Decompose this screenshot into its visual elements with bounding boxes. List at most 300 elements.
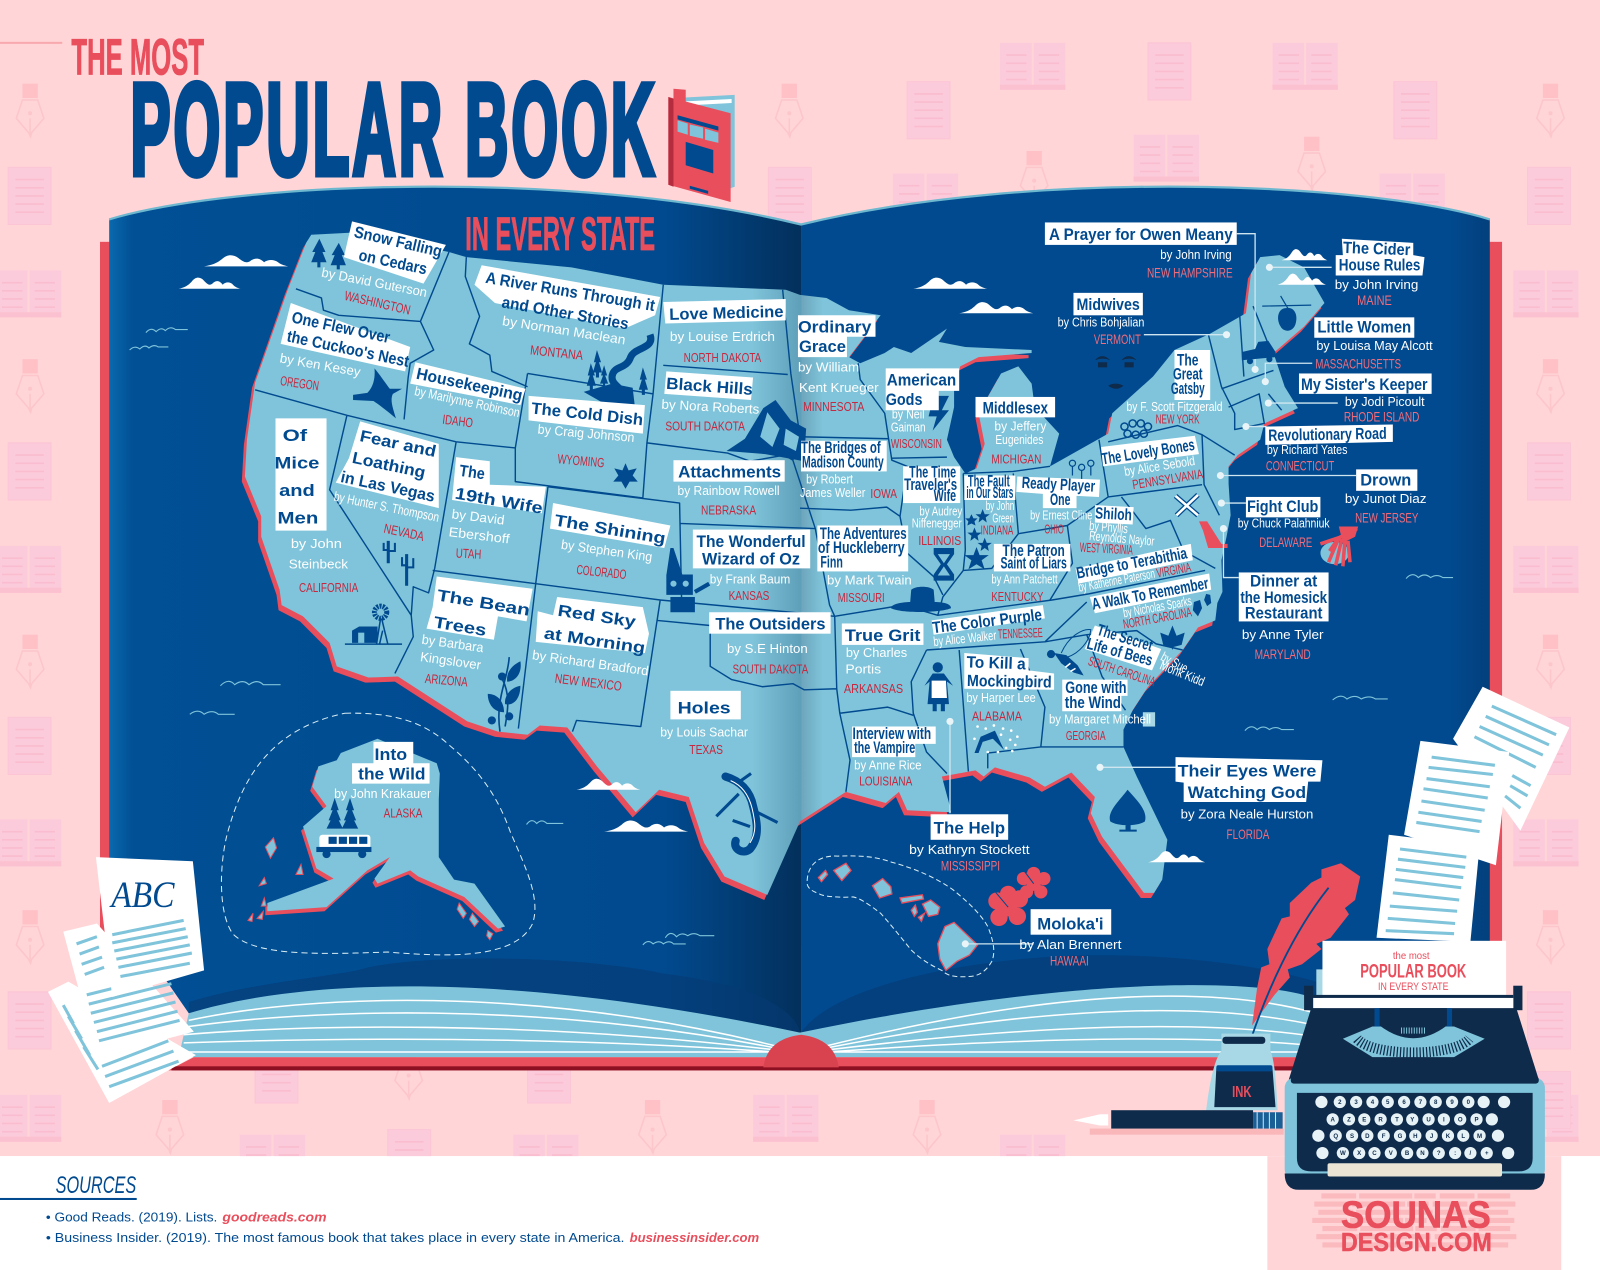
label: South Dakota — [661, 371, 760, 434]
label: Missouri: The Adventures — [820, 525, 907, 543]
label: Indiana: Green — [992, 510, 1014, 525]
label: North Carolina — [1090, 573, 1211, 632]
label: Connecticut — [1265, 424, 1393, 474]
label: Louisiana: LOUISIANA — [859, 774, 912, 789]
icon: florida tree — [1110, 790, 1145, 832]
label: New York: Great — [1173, 366, 1203, 384]
label: Nevada: NEVADA — [382, 521, 426, 544]
keyboard letters: 9 — [1450, 1099, 1454, 1106]
keyboard letters: : — [1454, 1150, 1456, 1157]
icon: pickup truck — [1242, 341, 1276, 364]
label: Ohio: by Ernest Cline — [1030, 507, 1092, 522]
label: New Hampshire — [1045, 222, 1237, 282]
label: Arizona: Trees — [432, 613, 488, 640]
book spine — [763, 1035, 839, 1067]
label: Georgia: Gone with — [1065, 679, 1127, 697]
label: North Dakota: Love Medicine — [669, 303, 784, 324]
label: Wyoming: WYOMING — [557, 451, 605, 470]
label: Utah — [448, 457, 546, 562]
label: Pennsylvania — [1100, 436, 1204, 492]
keyboard letters: 3 — [1354, 1099, 1358, 1106]
label: Arizona: ARIZONA — [424, 671, 468, 690]
fountain pen — [1073, 1110, 1284, 1135]
label: Oklahoma: The Outsiders — [715, 616, 826, 634]
keyboard letters: Q — [1333, 1133, 1338, 1140]
keyboard letters: B — [1405, 1150, 1410, 1157]
label: Utah: The — [458, 462, 486, 483]
label: Iowa: IOWA — [870, 486, 897, 501]
label: Tennessee: TENNESSEE — [998, 625, 1043, 642]
label: Georgia: GEORGIA — [1066, 728, 1106, 743]
book page block — [179, 985, 1327, 1057]
icon: face with eyes and lips — [1095, 356, 1137, 389]
keyboard letters: ? — [1437, 1150, 1441, 1157]
label: Florida: by Zora Neale Hurston — [1181, 806, 1313, 821]
label: Hawaii: Moloka'i — [1037, 916, 1104, 934]
loose papers, left — [48, 857, 204, 1103]
ink bottle — [1206, 1034, 1278, 1110]
label: Indiana — [964, 473, 1015, 538]
label: Arkansas: Portis — [845, 661, 882, 676]
keyboard letters: G — [1398, 1133, 1403, 1140]
keyboard letters: V — [1389, 1150, 1394, 1157]
label: New Jersey: Drown — [1360, 472, 1411, 490]
keyboard letters: W — [1340, 1150, 1346, 1157]
label: Oregon: the Cuckoo's Nest — [285, 327, 411, 371]
icon: hibiscus flowers — [988, 867, 1051, 926]
label: Illinois: Wife — [934, 487, 956, 505]
label: Tennessee: The Color Purple — [931, 606, 1043, 637]
label: Utah: UTAH — [455, 546, 482, 562]
label: Florida: Their Eyes Were — [1178, 763, 1316, 781]
keyboard letters: U — [1426, 1116, 1431, 1123]
label: South Carolina: Monk Kidd — [1158, 658, 1207, 689]
icon: red book — [668, 89, 735, 202]
label: Wisconsin: Gods — [886, 391, 922, 409]
label: Louisiana: Interview with — [853, 725, 931, 743]
label: Illinois — [903, 464, 963, 548]
keyboard letters: O — [1458, 1116, 1463, 1123]
label: Pennsylvania: by Alice Sebold — [1123, 453, 1196, 479]
sources list: goodreads.com — [221, 1209, 327, 1224]
label: South Carolina: SOUTH CAROLINA — [1086, 653, 1157, 689]
label: Mississippi: by Kathryn Stockett — [909, 842, 1030, 857]
label: Washington: by David Guterson — [320, 265, 428, 300]
title: POPULAR BOOK — [131, 58, 654, 202]
keyboard letters: / — [1470, 1150, 1472, 1157]
label: Utah: by David — [451, 506, 505, 528]
icon: bird — [353, 368, 402, 418]
label: Massachusetts: MASSACHUSETTS — [1315, 356, 1401, 372]
label: Idaho — [410, 362, 526, 430]
label: California: Of — [283, 427, 308, 445]
label: Alabama — [964, 653, 1054, 723]
label: Tennessee — [931, 605, 1045, 649]
label: Maryland: Restaurant — [1245, 604, 1323, 622]
label: Michigan: Middlesex — [983, 399, 1048, 417]
label: Iowa: by Robert — [806, 472, 853, 487]
icon: stars — [964, 509, 992, 569]
label: North Dakota: by Louise Erdrich — [670, 329, 775, 344]
label: Kansas: KANSAS — [729, 588, 770, 603]
label: Alabama: by Harper Lee — [966, 690, 1036, 705]
sources list: businessinsider.com — [630, 1230, 759, 1245]
label: Minnesota: Ordinary — [798, 319, 871, 337]
label: Nebraska: Attachments — [678, 464, 781, 482]
label: Louisiana: by Anne Rice — [854, 757, 921, 772]
icon: pearl necklace — [1121, 420, 1152, 438]
label: Alaska — [334, 742, 432, 820]
label: Washington: Snow Falling — [352, 223, 444, 261]
title: THE MOST — [71, 28, 204, 85]
keyboard letters: F — [1382, 1133, 1386, 1140]
label: Hawaii — [1019, 909, 1122, 969]
typewriter paper: the most — [1393, 951, 1430, 962]
book cover — [100, 242, 1502, 1070]
icon: apple branch — [1262, 296, 1311, 331]
label: Tennessee: by Alice Walker — [933, 628, 997, 649]
label: Kansas — [693, 530, 810, 603]
icon: pine trees — [311, 239, 346, 269]
label: Nevada: Fear and — [358, 427, 438, 461]
label: Maryland — [1239, 572, 1329, 663]
label: Washington: on Cedars — [357, 246, 429, 278]
keyboard letters: A — [1330, 1116, 1335, 1123]
label: Delaware: Fight Club — [1247, 498, 1318, 516]
keyboard letters: D — [1365, 1133, 1370, 1140]
keyboard letters: J — [1430, 1133, 1433, 1140]
label: Arizona: Kingslover — [419, 649, 483, 673]
label: Nevada: by Hunter S. Thompson — [333, 489, 441, 525]
label: Idaho: by Marilynne Robinson — [413, 383, 521, 420]
typewriter paper: POPULAR BOOK — [1360, 961, 1466, 983]
label: Ohio — [1016, 474, 1100, 537]
label: Arkansas: ARKANSAS — [844, 681, 903, 696]
label: Georgia: the Wind — [1065, 694, 1121, 712]
logo: DESIGN.COM — [1341, 1229, 1492, 1257]
keyboard letters: 4 — [1371, 1099, 1375, 1106]
label: Arizona — [419, 577, 533, 690]
label: Alabama: Mockingbird — [967, 672, 1052, 691]
keyboard letters: 7 — [1419, 1099, 1423, 1106]
label: Louisiana — [852, 725, 936, 789]
label: Missouri: by Mark Twain — [827, 573, 912, 588]
label: Kansas: The Wonderful — [696, 533, 806, 551]
icon: red hand — [1320, 527, 1358, 566]
label: Nebraska: NEBRASKA — [701, 502, 756, 517]
keyboard letters: Z — [1347, 1116, 1351, 1123]
label: North Carolina: by Nicholas Sparks — [1122, 593, 1193, 620]
sources list — [46, 1209, 759, 1245]
label: New Jersey: by Junot Diaz — [1345, 491, 1427, 506]
label: Ohio: Ready Player — [1021, 474, 1096, 496]
label: Kentucky: KENTUCKY — [991, 589, 1043, 604]
label: Connecticut: CONNECTICUT — [1266, 458, 1334, 474]
label: Arizona: The Bean — [436, 587, 531, 620]
label: Arkansas: by Charles — [846, 645, 907, 660]
label: Nebraska: by Rainbow Rowell — [678, 483, 780, 498]
label: Vermont: by Chris Bohjalian — [1058, 315, 1144, 330]
keyboard keys — [1312, 1096, 1514, 1159]
book pages — [109, 187, 1490, 1033]
label: Texas: Holes — [678, 699, 731, 717]
label: New York: Gatsby — [1171, 380, 1205, 398]
label: Oklahoma — [709, 612, 831, 676]
ocean waves — [130, 328, 1453, 945]
label: Kansas: by Frank Baum — [710, 572, 790, 587]
sources list: • Good Reads. (2019). Lists. — [46, 1209, 217, 1224]
label: Rhode Island: by Jodi Picoult — [1345, 394, 1425, 409]
label: Kentucky: Saint of Liars — [1001, 554, 1067, 572]
logo panel — [1267, 1156, 1561, 1270]
label: Montana — [474, 265, 660, 363]
label: Nebraska — [673, 460, 785, 517]
label: Illinois: by Audrey — [919, 503, 963, 518]
label: Washington: WASHINGTON — [343, 288, 412, 318]
label: Florida: FLORIDA — [1227, 827, 1270, 843]
label: Wisconsin: WISCONSIN — [891, 436, 942, 451]
label: Rhode Island — [1299, 373, 1432, 425]
sources list: • Business Insider. (2019). The most famous book that takes place in every state in America. — [46, 1230, 624, 1245]
label: Maryland: by Anne Tyler — [1242, 627, 1324, 642]
label: Illinois: Niffenegger — [912, 516, 962, 531]
label: Connecticut: Revolutionary Road — [1268, 425, 1387, 445]
label: Vermont: Midwives — [1077, 296, 1140, 314]
label: West Virginia: by Phyllis — [1089, 518, 1129, 536]
label: Indiana: The Fault — [968, 473, 1010, 491]
keyboard letters: N — [1420, 1150, 1425, 1157]
label: Georgia — [1049, 679, 1155, 743]
label: Delaware: by Chuck Palahniuk — [1238, 516, 1330, 531]
label: California — [274, 418, 358, 595]
label: Michigan: Eugenides — [995, 432, 1044, 447]
label: Vermont: VERMONT — [1094, 332, 1141, 348]
icon: woman in apron — [924, 662, 953, 711]
label: North Carolina: NORTH CAROLINA — [1122, 604, 1193, 632]
icon: hourglass — [934, 548, 954, 581]
label: New Hampshire: by John Irving — [1160, 247, 1232, 262]
label: Delaware: DELAWARE — [1259, 535, 1312, 551]
keyboard letters: 8 — [1434, 1099, 1438, 1106]
icon: lizard — [716, 773, 778, 851]
label: Illinois: The Time — [909, 464, 956, 482]
keyboard letters: I — [1443, 1116, 1445, 1123]
label: Wisconsin: by Neil — [892, 406, 925, 421]
label: West Virginia: WEST VIRGINIA — [1079, 540, 1133, 557]
label: Indiana: by John — [986, 498, 1014, 513]
icon: keys — [1069, 460, 1094, 480]
icon: lightning bolt — [929, 396, 949, 431]
ink bottle: INK — [1232, 1084, 1252, 1101]
typewriter paper: IN EVERY STATE — [1378, 981, 1448, 993]
label: Louisiana: the Vampire — [854, 739, 915, 757]
loose papers, left: ABC — [108, 874, 175, 915]
label: South Carolina: The Secret — [1095, 621, 1155, 655]
label: Wisconsin: American — [887, 372, 956, 390]
icon: cacti — [383, 541, 414, 586]
logo: SOUNAS — [1341, 1194, 1491, 1236]
label: Arizona: by Barbara — [421, 632, 485, 655]
keyboard letters: H — [1413, 1133, 1418, 1140]
label: Utah: 19th Wife — [454, 485, 544, 518]
label: Mississippi: MISSISSIPPI — [941, 858, 1000, 874]
label: Maryland: Dinner at — [1250, 573, 1318, 591]
label: Connecticut: by Richard Yates — [1267, 442, 1348, 457]
label: New Jersey — [1345, 469, 1427, 526]
label: Indiana: INDIANA — [981, 523, 1013, 538]
label: Hawaii: by Alan Brennert — [1019, 937, 1122, 952]
label: Alaska: Into — [374, 746, 407, 764]
keyboard letters: X — [1357, 1150, 1362, 1157]
label: Ohio: One — [1050, 491, 1070, 509]
keyboard letters: Y — [1410, 1116, 1414, 1123]
map of Alaska — [221, 713, 535, 955]
label: California: CALIFORNIA — [299, 580, 358, 595]
label: Iowa: James Weller — [800, 485, 866, 500]
keyboard letters: + — [1485, 1150, 1489, 1157]
map of Hawaii — [807, 856, 994, 977]
keyboard letters: P — [1474, 1116, 1479, 1123]
label: West Virginia: Reynolds Naylor — [1089, 528, 1155, 549]
label: Delaware — [1238, 497, 1330, 551]
label: Minnesota: by William — [798, 359, 859, 374]
label: Wyoming: by Craig Johnson — [537, 422, 635, 445]
label: Colorado: by Stephen King — [560, 537, 653, 564]
label: New York — [1127, 350, 1222, 426]
label: Idaho: Housekeeping — [415, 365, 524, 405]
icon: straw hat — [891, 587, 951, 612]
clouds — [179, 249, 1327, 862]
label: Colorado — [550, 503, 670, 582]
label: Alabama: ALABAMA — [972, 708, 1022, 723]
label: Nevada: in Las Vegas — [339, 468, 437, 506]
icon: bus and pines — [316, 798, 371, 858]
label: Washington — [320, 221, 446, 318]
label: Maine: The Cider — [1343, 239, 1411, 259]
label: Nevada — [333, 421, 441, 544]
label: Colorado: COLORADO — [576, 562, 627, 582]
icon: bee — [1047, 629, 1091, 676]
label: California: Steinbeck — [289, 556, 348, 571]
map of contiguous United States — [242, 233, 1324, 900]
label: New Hampshire: A Prayer for Owen Meany — [1049, 226, 1233, 244]
label: Texas: by Louis Sachar — [660, 725, 749, 740]
label: West Virginia — [1079, 504, 1155, 557]
keyboard letters: R — [1378, 1116, 1383, 1123]
feather quill — [1243, 863, 1360, 1064]
sources heading — [0, 1172, 137, 1200]
icon: dogwood sprig — [1193, 594, 1211, 616]
label: Arkansas — [842, 623, 923, 696]
label: Maryland: the Homesick — [1240, 589, 1328, 607]
label: South Dakota: SOUTH DAKOTA — [665, 419, 745, 434]
label: Alabama: To Kill a — [966, 653, 1027, 673]
label: Pennsylvania: The Lovely Bones — [1100, 436, 1196, 468]
label: Utah: Ebershoff — [448, 524, 511, 547]
label: Illinois: ILLINOIS — [918, 533, 961, 548]
label: Oregon: by Ken Kesey — [279, 350, 362, 379]
label: Florida: Watching God — [1188, 784, 1306, 802]
label: Vermont — [1058, 293, 1144, 348]
sources white area — [0, 1156, 1600, 1270]
label: Texas — [660, 691, 749, 757]
label: Idaho: IDAHO — [442, 412, 474, 430]
icon: knife and fork — [1176, 495, 1198, 515]
keyboard letters: S — [1350, 1133, 1354, 1140]
label: Massachusetts — [1314, 317, 1433, 372]
label: Missouri — [817, 525, 912, 605]
label: New York: NEW YORK — [1156, 411, 1200, 426]
label: Mississippi — [909, 814, 1030, 874]
label: Nevada: Loathing — [350, 449, 427, 482]
label: Virginia: VIRGINIA — [1155, 560, 1192, 581]
label: Georgia: by Margaret Mitchell — [1049, 711, 1151, 726]
label: North Carolina: A Walk To Remember — [1090, 574, 1210, 614]
icon: windmill and barn — [345, 606, 402, 645]
label: Florida — [1176, 757, 1322, 843]
label: Alaska: by John Krakauer — [334, 786, 432, 801]
label: Maine: MAINE — [1357, 293, 1392, 309]
label: Missouri: MISSOURI — [838, 590, 885, 605]
keyboard letters: 5 — [1386, 1099, 1390, 1106]
label: Maine — [1335, 239, 1424, 309]
label: Kansas: Wizard of Oz — [702, 550, 800, 568]
label: South Carolina — [1085, 621, 1207, 689]
state borders — [255, 252, 1282, 792]
label: Ohio: OHIO — [1044, 522, 1064, 537]
label: New Mexico: NEW MEXICO — [554, 671, 623, 694]
label: Rhode Island: My Sister's Keeper — [1301, 376, 1428, 394]
label: New Mexico: by Richard Bradford — [531, 647, 650, 678]
label: North Dakota — [663, 299, 786, 365]
label: Michigan: by Jeffery — [994, 419, 1047, 434]
label: Wisconsin — [886, 368, 959, 451]
label: Montana: by Norman Maclean — [501, 313, 627, 347]
label: South Dakota: Black Hills — [666, 375, 753, 399]
label: California: Mice — [274, 454, 319, 472]
label: California: and — [279, 482, 315, 500]
label: Iowa: Madison County — [802, 453, 884, 471]
label: Indiana: in Our Stars — [966, 484, 1013, 502]
label: New Hampshire: NEW HAMPSHIRE — [1147, 266, 1233, 282]
icon: magnolia leaf — [1160, 626, 1185, 650]
keyboard letters — [1330, 1099, 1489, 1157]
label: Wisconsin: Gaiman — [891, 420, 926, 435]
logo — [1312, 1194, 1516, 1257]
loose papers, right — [1377, 687, 1569, 942]
keyboard letters: E — [1362, 1116, 1366, 1123]
label: South Carolina: by Sue — [1158, 649, 1191, 676]
keyboard letters: 2 — [1338, 1099, 1342, 1106]
label: Arkansas: True Grit — [845, 627, 921, 645]
label: Montana: A River Runs Through it — [484, 269, 657, 315]
label: Mississippi: The Help — [934, 820, 1005, 838]
keyboard letters: 6 — [1402, 1099, 1406, 1106]
icon: mountain — [727, 400, 806, 461]
label: Illinois: Traveler's — [904, 476, 957, 494]
keyboard letters: M — [1477, 1133, 1482, 1140]
label: New Jersey: NEW JERSEY — [1355, 510, 1419, 526]
label: Minnesota — [798, 315, 879, 414]
label: Michigan: MICHIGAN — [991, 451, 1041, 466]
label: New York: The — [1177, 351, 1198, 369]
top-left rule — [0, 42, 62, 44]
label: Oregon: One Flew Over — [290, 309, 392, 347]
label: Maine: House Rules — [1339, 256, 1420, 274]
label: Oregon: OREGON — [279, 373, 320, 393]
keyboard letters: L — [1461, 1133, 1465, 1140]
label: California: by John — [291, 536, 342, 551]
